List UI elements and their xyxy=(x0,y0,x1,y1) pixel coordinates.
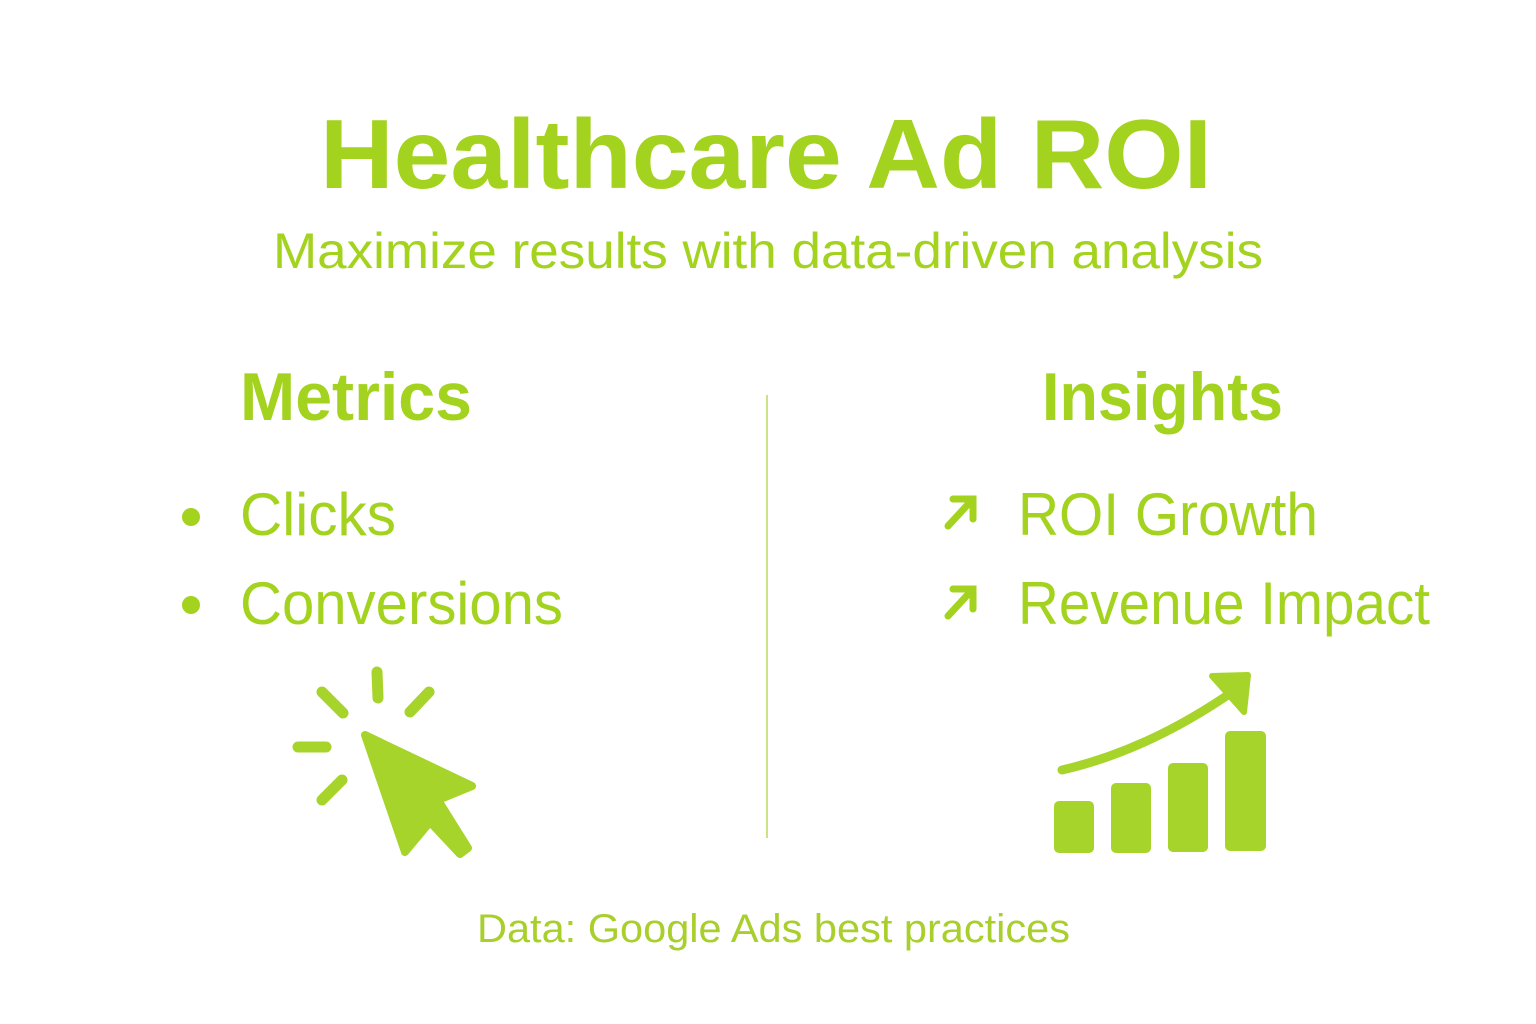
list: metrics items: Clicks xyxy=(240,481,396,548)
icon: growth bar chart xyxy=(1054,675,1266,853)
panel: insights xyxy=(948,359,1430,853)
icon: cursor click xyxy=(298,672,472,854)
heading: Metrics: Metrics xyxy=(240,359,472,435)
subtitle: Maximize results with data-driven analysis xyxy=(273,223,1263,279)
heading: Insights: Insights xyxy=(1042,359,1283,435)
title: Healthcare Ad ROI xyxy=(320,99,1212,209)
list: insights items: Revenue Impact xyxy=(1018,570,1430,637)
footer: source: Data: Google Ads best practices xyxy=(477,907,1070,951)
list: metrics items xyxy=(182,481,563,637)
panel: metrics xyxy=(182,359,563,854)
list: metrics items: Conversions xyxy=(240,570,563,637)
list: insights items xyxy=(948,481,1430,637)
list: insights items: ROI Growth xyxy=(1018,481,1318,548)
divider xyxy=(766,395,768,838)
